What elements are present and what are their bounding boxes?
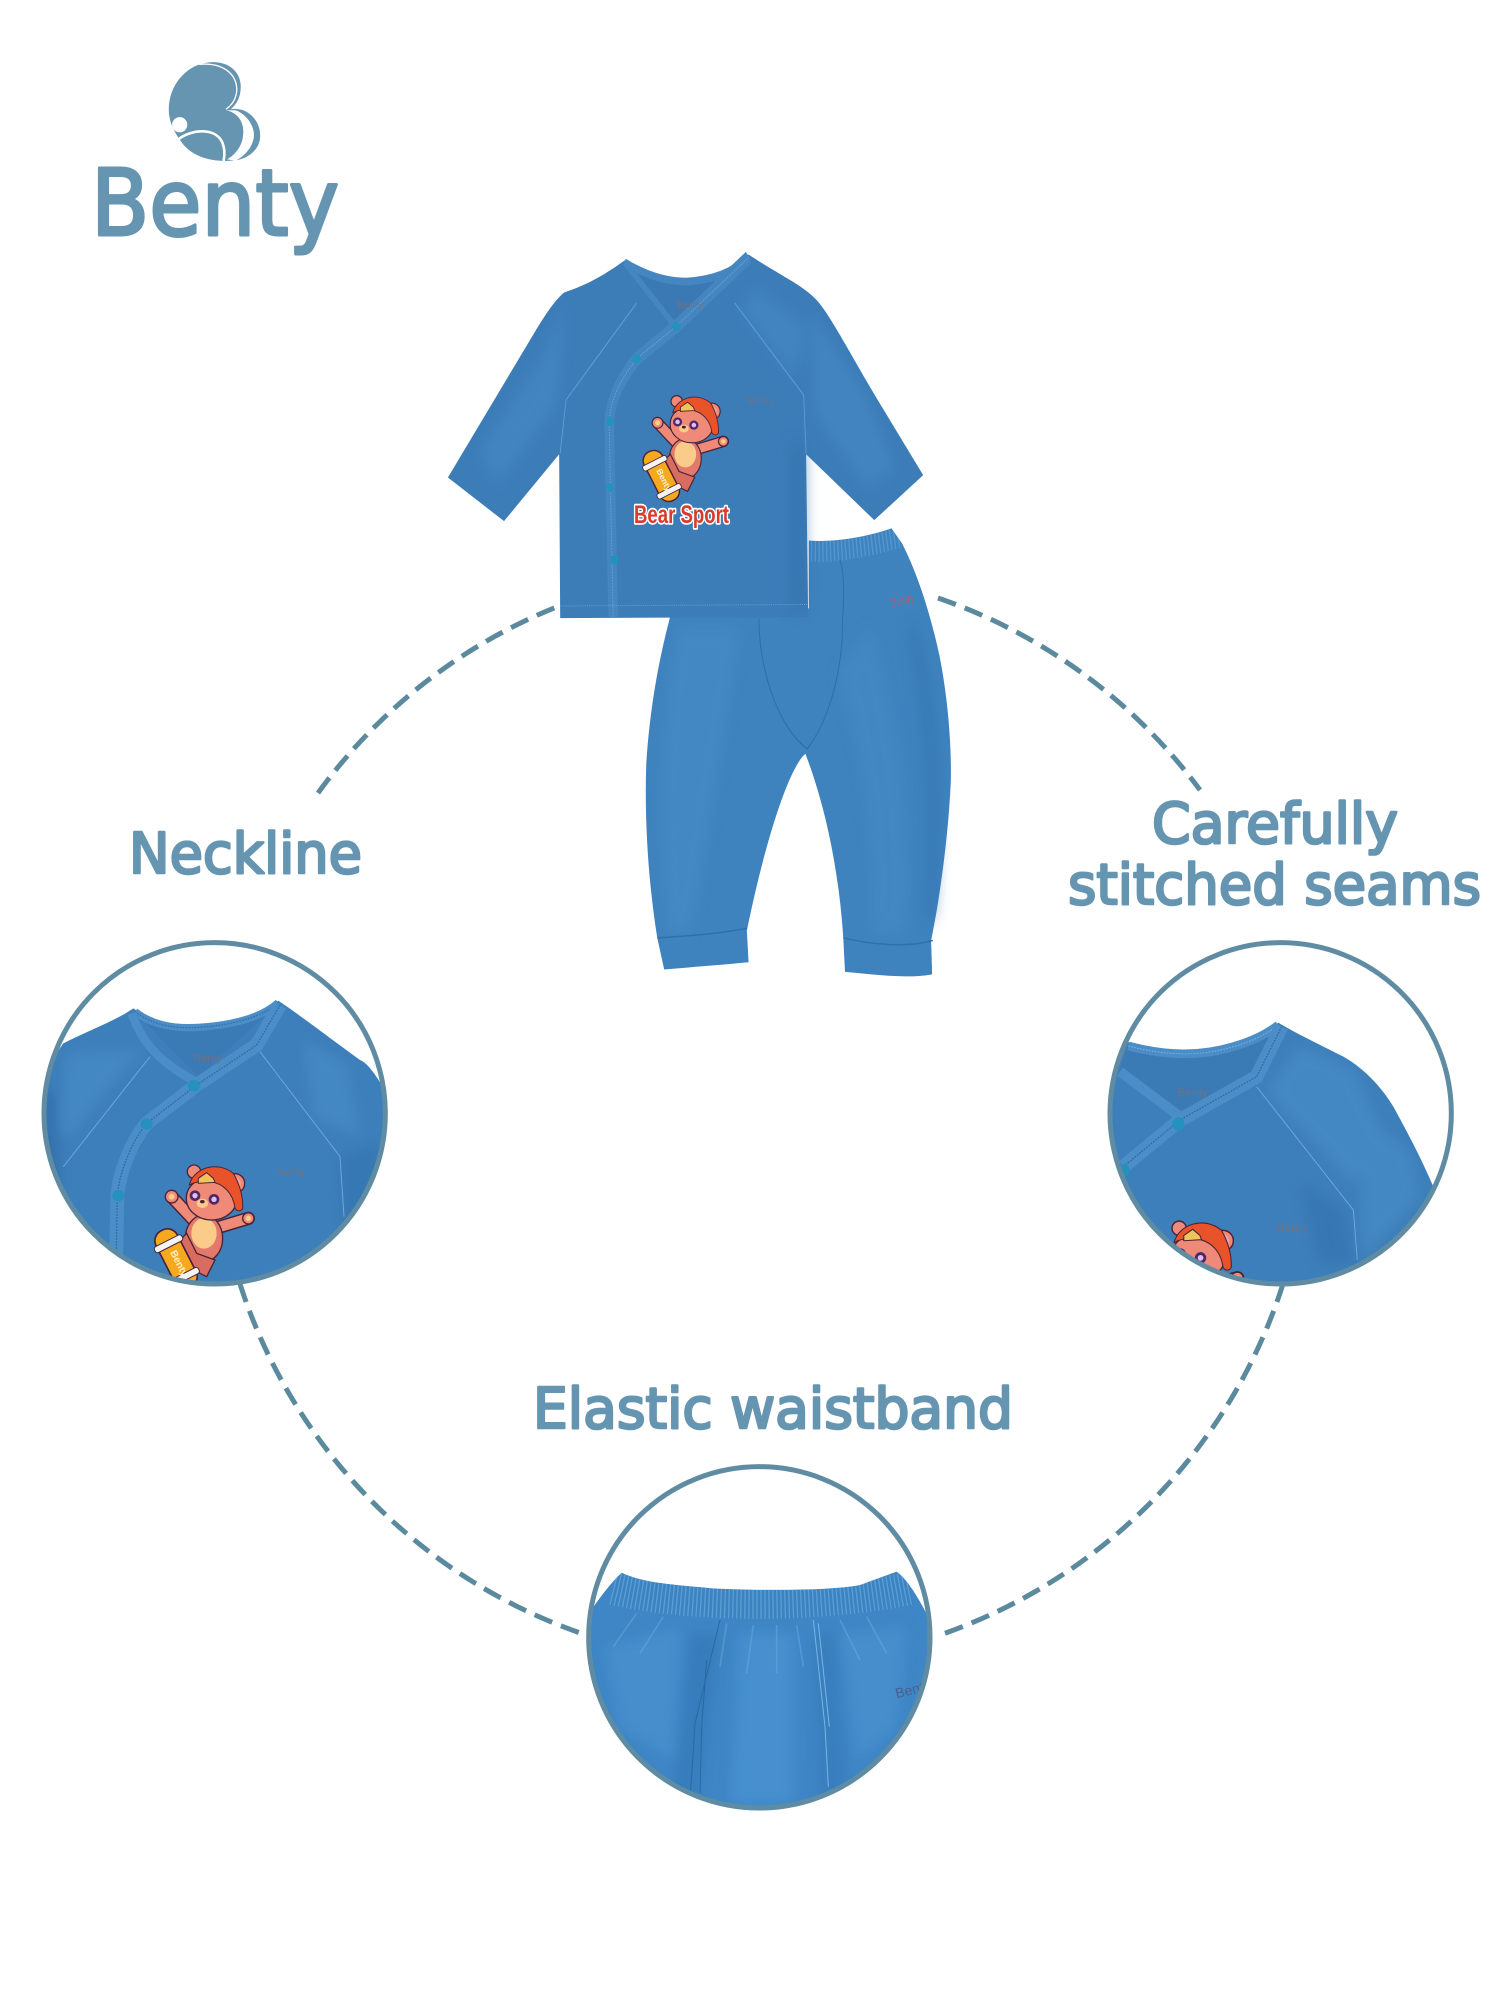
dashed connector ring — [240, 598, 1283, 1636]
shirt brand marks: Benty — [677, 300, 703, 311]
icon: logo mark — [169, 62, 260, 161]
shirt brand marks: Benty — [748, 396, 774, 407]
label: Elastic waistband: Elastic waistband — [533, 1377, 1013, 1442]
shirt print text: Bear Sport — [634, 501, 729, 529]
detail circle: neckline — [40, 943, 397, 1297]
label: Neckline: Neckline — [129, 822, 362, 887]
shirt print: bear — [637, 396, 728, 506]
detail circle: stitched seams: Benty — [1277, 1221, 1307, 1235]
detail circle: neckline: Benty — [276, 1166, 305, 1178]
product: pants: Benty — [889, 590, 916, 611]
logo wordmark: Benty — [91, 150, 339, 257]
label: Carefully stitched seams — [1068, 792, 1481, 918]
detail circle: stitched seams — [1108, 940, 1454, 1286]
brand logo — [91, 62, 339, 257]
label: Carefully stitched seams: Carefully — [1152, 792, 1398, 857]
detail circle: neckline: Benty — [193, 1053, 223, 1065]
product: shirt — [448, 255, 923, 618]
product: pants — [646, 528, 951, 976]
label: Carefully stitched seams: stitched seams — [1068, 853, 1481, 918]
detail circle: elastic waistband — [580, 1467, 933, 1827]
detail circle: stitched seams: Benty — [1177, 1086, 1208, 1100]
shirt brand marks — [677, 300, 774, 407]
detail circle: elastic waistband: Benty — [894, 1677, 932, 1701]
